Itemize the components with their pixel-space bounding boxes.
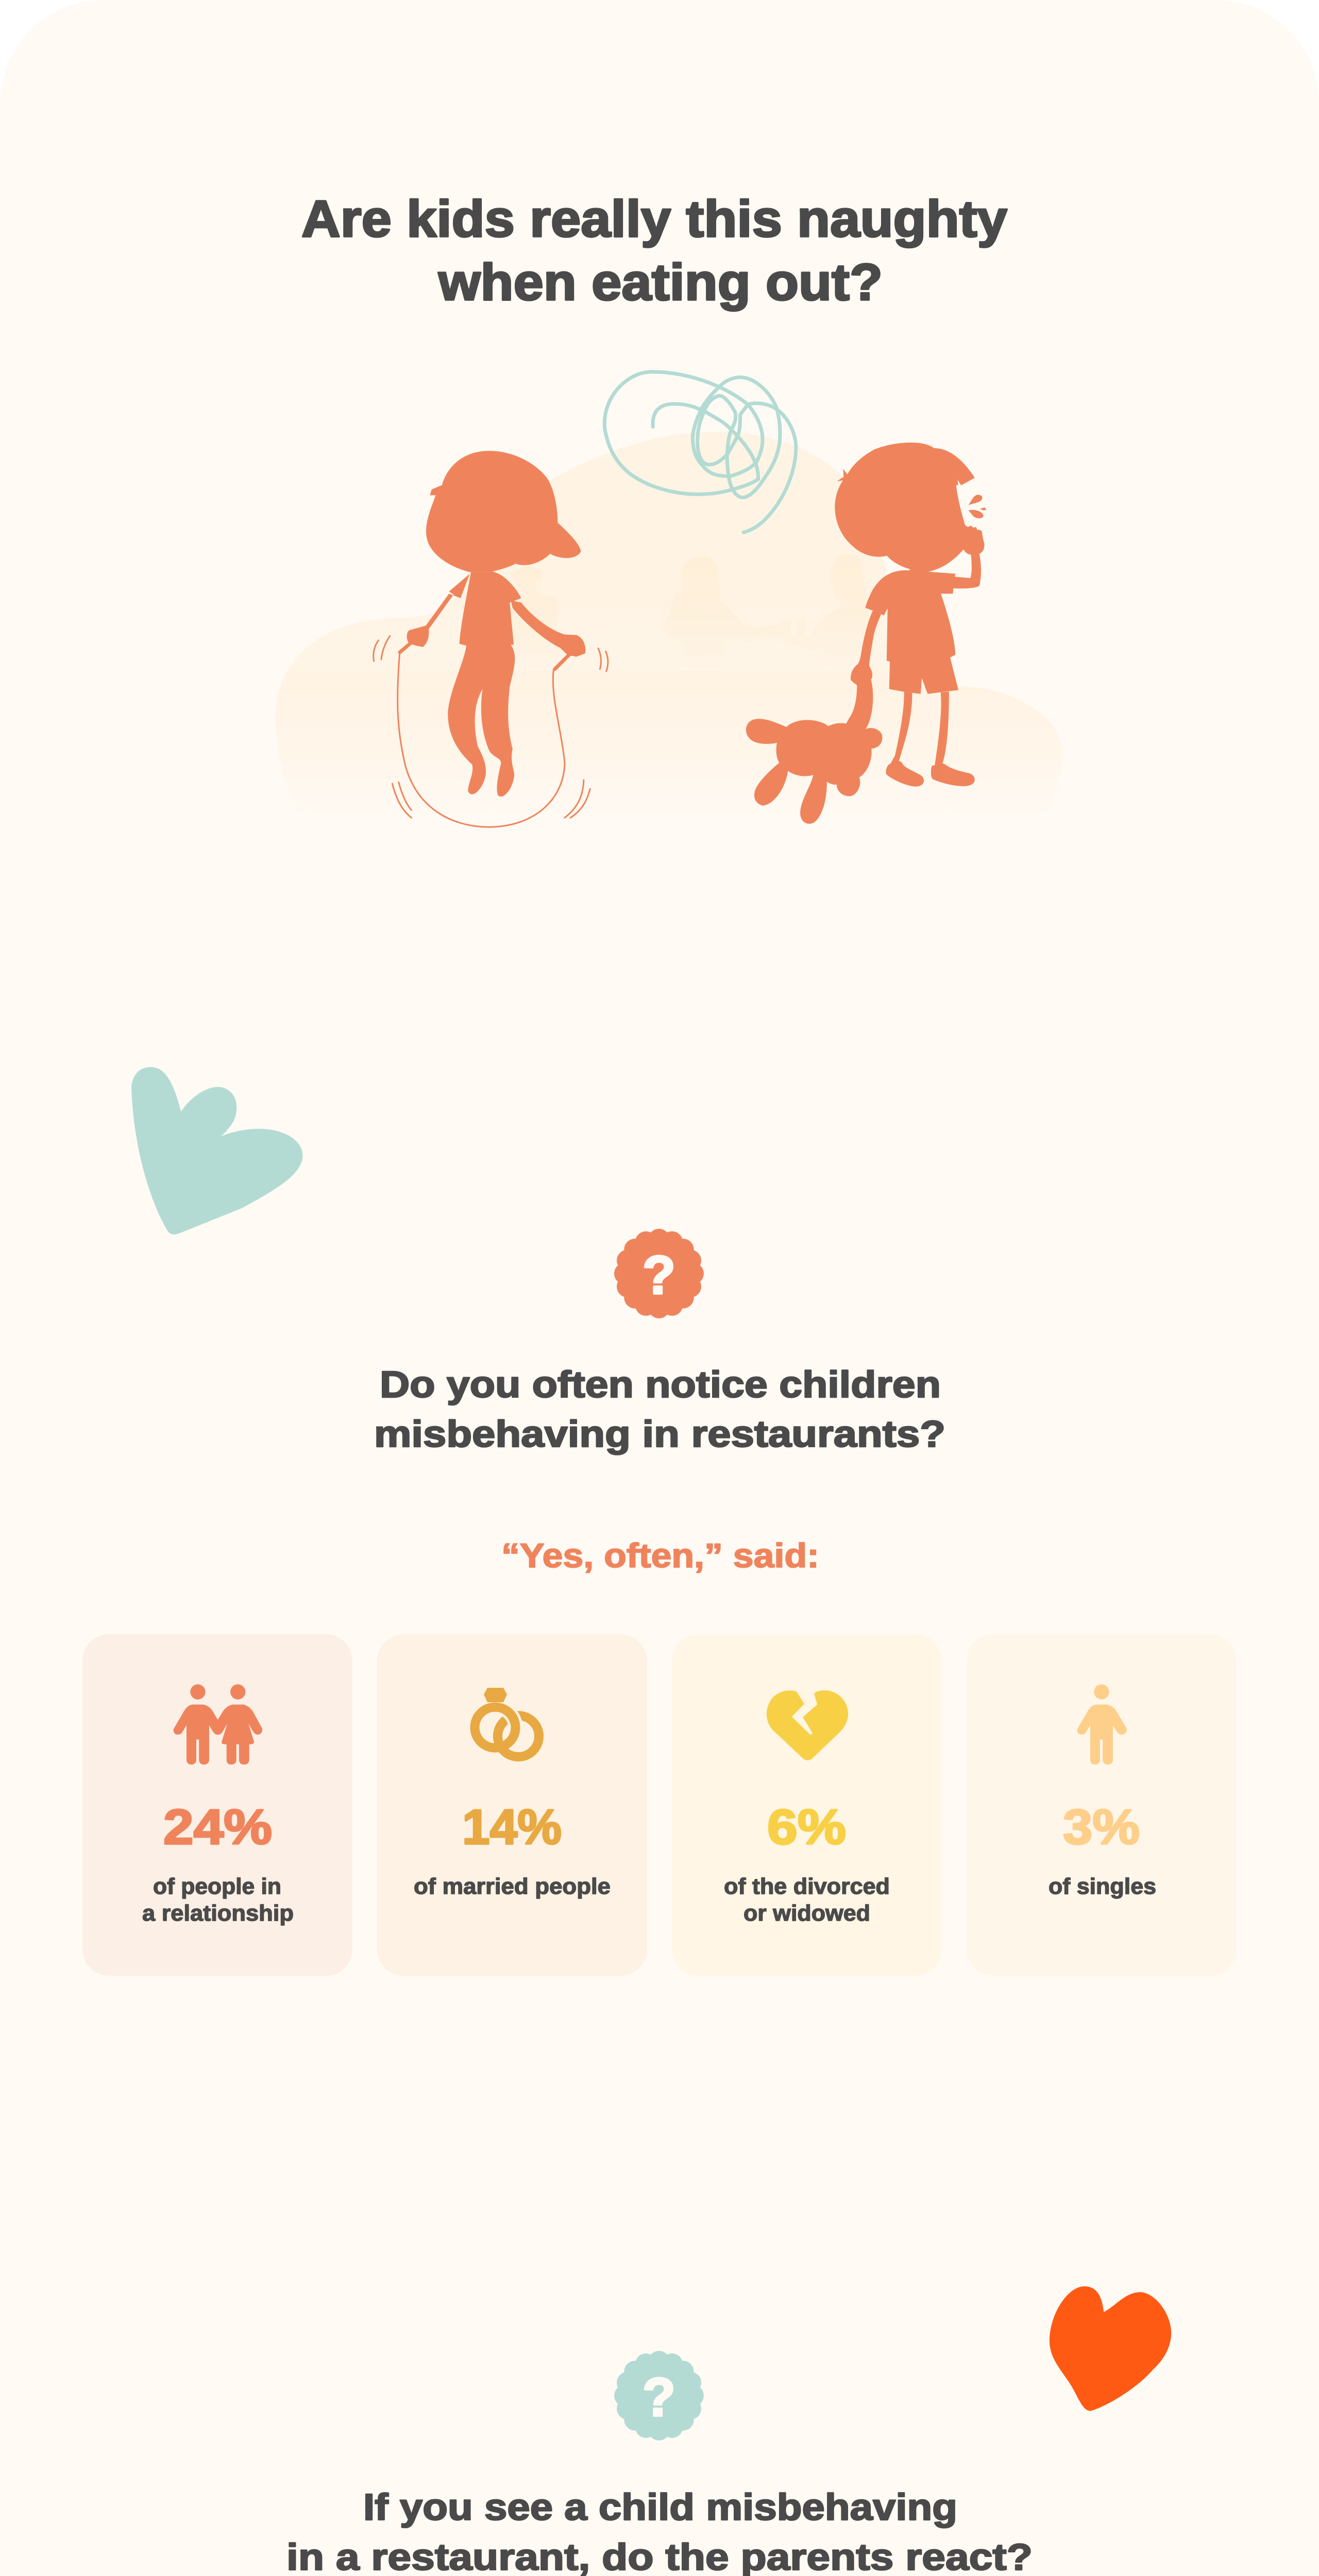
heading: question 2 xyxy=(286,2487,1033,2576)
heading: question 2: If you see a child misbehaving xyxy=(363,2487,957,2528)
title: Are kids really this naughty xyxy=(301,190,1007,248)
label: divorced: or widowed xyxy=(743,1901,870,1926)
label: married: of married people xyxy=(414,1874,611,1899)
stat: 6%: 6% xyxy=(767,1800,846,1855)
icon: wedding rings xyxy=(475,1688,539,1757)
panel: divorced or widowed xyxy=(672,1634,942,1976)
label: relationship: a relationship xyxy=(142,1901,294,1926)
restaurant background blob xyxy=(276,432,1062,824)
question badge: teal: ? xyxy=(642,2367,675,2428)
panel: people in a relationship xyxy=(82,1634,352,1976)
illustration: kids misbehaving in a restaurant xyxy=(276,372,1062,827)
panel: married people xyxy=(377,1634,647,1976)
question badge: teal xyxy=(614,2351,704,2441)
question badge: coral: ? xyxy=(642,1245,675,1306)
panel: singles xyxy=(967,1634,1237,1976)
heading: question 1: Do you often notice children xyxy=(380,1364,941,1405)
title: when eating out? xyxy=(438,253,883,311)
label: divorced xyxy=(724,1874,890,1926)
decoration: orange heart xyxy=(1050,2286,1171,2411)
jumping kid with rope xyxy=(374,451,608,827)
boy with teddy bear xyxy=(746,443,987,824)
icon: single person xyxy=(1077,1684,1127,1765)
stat: 14%: 14% xyxy=(462,1800,562,1855)
icon: broken heart xyxy=(767,1690,848,1760)
stat: 24%: 24% xyxy=(163,1800,272,1855)
heading: question 1 xyxy=(374,1364,945,1455)
title xyxy=(301,190,1007,311)
label: singles: of singles xyxy=(1049,1874,1156,1899)
label: divorced: of the divorced xyxy=(724,1874,890,1899)
diners silhouettes xyxy=(509,554,874,671)
subheading: yes, often: “Yes, often,” said: xyxy=(501,1536,819,1574)
decoration: teal heart xyxy=(131,1067,303,1234)
icon: couple xyxy=(174,1684,262,1765)
question badge: coral xyxy=(614,1229,704,1318)
label: relationship: of people in xyxy=(153,1874,281,1899)
scribble above kids xyxy=(604,372,796,532)
label: relationship xyxy=(142,1874,294,1926)
heading: question 1: misbehaving in restaurants? xyxy=(374,1414,945,1455)
stat: 3%: 3% xyxy=(1063,1800,1140,1855)
